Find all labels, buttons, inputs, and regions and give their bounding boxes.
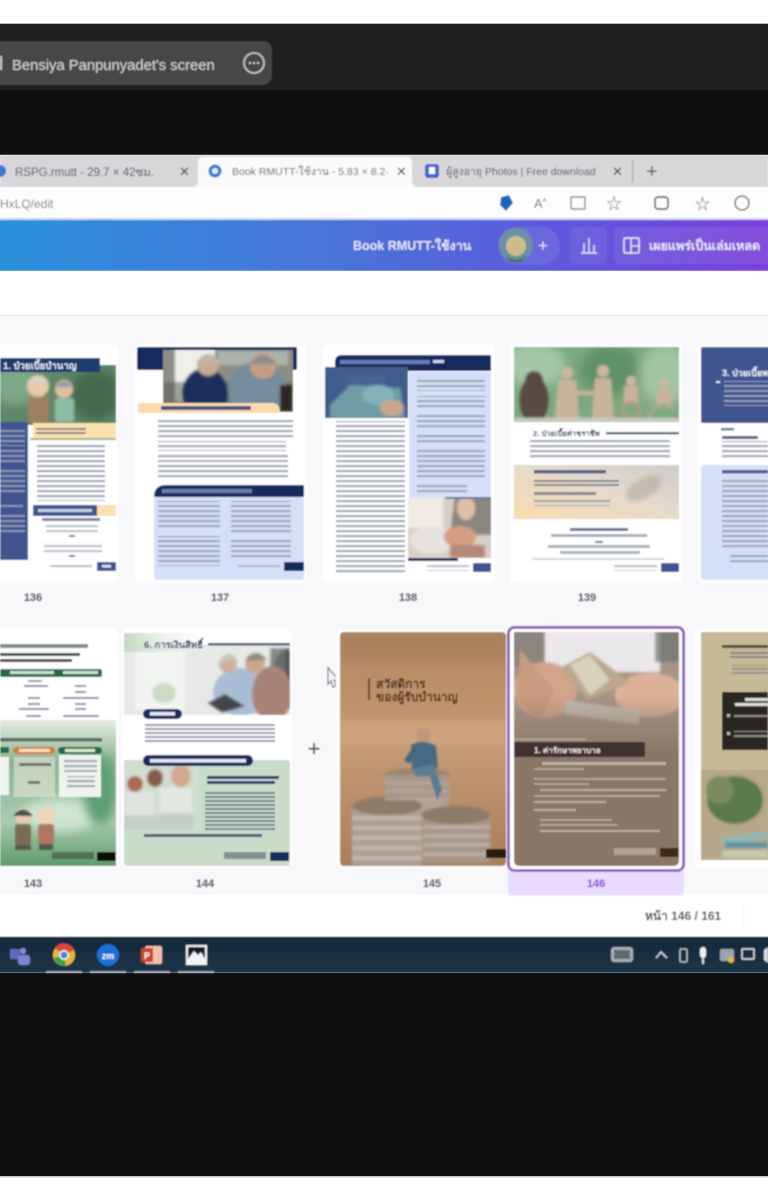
lavender number tab: [508, 860, 684, 895]
text: [207, 776, 279, 779]
page numbers row one: 138: [399, 592, 417, 604]
left text: [336, 421, 405, 575]
address bar: [0, 187, 768, 220]
browser tab strip: ผู้สูงอายุ Photos | Free download: [446, 166, 596, 178]
text: [721, 428, 768, 459]
icon: teams: [10, 948, 30, 965]
photo: group: [124, 760, 198, 829]
blue header: [701, 347, 768, 423]
icon: zoom: [97, 944, 119, 966]
footer tag: [224, 852, 289, 861]
yellow heading bar: [138, 403, 280, 413]
blue side panel: [0, 422, 28, 560]
footer tag: [52, 852, 116, 861]
beige band: [514, 465, 679, 519]
windows taskbar: [0, 937, 768, 973]
screen share name pill: [0, 41, 272, 85]
page numbers row one: 139: [578, 592, 596, 604]
photo: wooden figures: [513, 346, 680, 423]
page numbers row two: 144: [196, 878, 215, 890]
mouse cursor: [328, 668, 339, 687]
page 147 cropped: [700, 632, 768, 861]
system tray: [611, 947, 768, 964]
page numbers row one: 137: [211, 592, 229, 604]
lower brown panel: [514, 738, 679, 866]
page numbers row two: [24, 878, 605, 890]
taskbar active underlines: [46, 971, 214, 973]
address bar: HxLQ/edit: [0, 197, 54, 211]
coin stacks: [352, 768, 490, 866]
green table: [0, 669, 102, 717]
body text: [530, 440, 670, 460]
photo: paperwork: [408, 498, 492, 560]
address bar: ☆: [606, 195, 622, 213]
heading text: [0, 644, 88, 662]
page numbers row one: 136: [24, 592, 42, 604]
icon: photos: [186, 945, 207, 965]
light blue panel: [701, 465, 768, 580]
navy heading: [335, 355, 491, 371]
Canva editor header: +: [538, 236, 548, 255]
page numbers row two: 143: [24, 878, 42, 890]
green heading band: [124, 633, 290, 652]
page 143: [0, 629, 118, 868]
navy strip: [408, 558, 458, 561]
browser tab strip: RSPG.rmutt - 29.7 × 42ซม.: [15, 167, 154, 179]
white toolbar and page grid background: [0, 271, 768, 895]
centred text: [42, 518, 102, 557]
page 144: [120, 629, 300, 868]
page 138: [324, 354, 492, 573]
page numbers row two: 146: [587, 878, 605, 890]
light blue panel: [409, 372, 491, 499]
cover title: [368, 678, 370, 700]
green heading band: 6. การเงินสิทธิ์: [144, 637, 205, 651]
photo: couple at laptop: [124, 644, 291, 716]
page counter footer: หน้า 146 / 161: [645, 909, 722, 923]
panel heading: [0, 738, 102, 742]
body text: [145, 722, 275, 744]
right text: [417, 377, 485, 494]
pillars: [0, 757, 9, 795]
body text: [158, 418, 293, 480]
page 146 selected: [508, 628, 685, 895]
footer tag: [427, 563, 491, 572]
dark heading bar: [514, 742, 645, 757]
screen share name pill: Bensiya Panpunyadet's screen: [12, 58, 215, 74]
thumbnails row one: [0, 343, 768, 583]
green panel: [120, 755, 290, 866]
page 137: [135, 344, 306, 583]
yellow callout: [30, 423, 116, 440]
heading: 2. ป่วยเบี้ยค่าชราชีพ: [533, 427, 600, 438]
seated figure: [404, 728, 442, 800]
body text: [37, 443, 105, 501]
browser tab strip: ✕: [179, 164, 190, 179]
centred text: [532, 528, 664, 560]
number tag: [486, 849, 506, 858]
page 145 cover: ของผู้รับบำนาญ: [376, 690, 458, 705]
page numbers row one: [24, 592, 596, 604]
title bar: 1. ป่วยเบี้ยบำนาญ: [3, 358, 77, 372]
page 145 cover: [336, 629, 506, 868]
browser tab strip: +: [646, 161, 658, 183]
thumbnails row two: [0, 628, 768, 895]
green photo panel: [0, 718, 116, 866]
browser tab strip: ✕: [612, 164, 623, 179]
figurines: [13, 806, 55, 850]
page counter footer: [0, 894, 768, 937]
photo: elderly figures: [0, 364, 117, 426]
icon: zoom: zm: [102, 951, 114, 961]
photo: blue hands: [324, 366, 409, 419]
Canva editor header: Book RMUTT-ใช้งาน: [353, 238, 472, 253]
body text: [534, 762, 666, 832]
icon: powerpoint: P: [144, 951, 150, 961]
page 140 cropped: [697, 344, 768, 583]
photo: plant and books: [700, 770, 768, 860]
Canva editor header: [0, 220, 768, 271]
heading text: [722, 645, 768, 676]
footer tag: [614, 563, 679, 572]
light blue panel: [154, 485, 304, 580]
title bar: [0, 358, 100, 372]
add page plus: +: [308, 736, 320, 761]
page 136: [0, 357, 117, 572]
address bar: ᴬ: [542, 197, 547, 206]
page 139: [513, 346, 680, 573]
pill label: [143, 709, 182, 719]
footer tag: [614, 848, 679, 857]
page numbers row two: 145: [423, 878, 441, 890]
footer tag: [50, 562, 116, 571]
address bar: A: [534, 196, 543, 211]
dark callout box: [722, 692, 768, 750]
Canva editor header: เผยแพร่เป็นเล่มเหลด: [649, 238, 760, 253]
address bar: ☆: [695, 196, 710, 213]
icon: chrome: [53, 943, 75, 966]
browser tab strip: [0, 155, 768, 188]
page 145 cover: สวัสดิการ: [376, 677, 426, 691]
icon: powerpoint: [141, 946, 162, 964]
dark heading bar: 1. ค่ารักษาพยาบาล: [534, 746, 601, 755]
photo: hands counting money: [510, 628, 685, 756]
pill heading: [143, 755, 253, 766]
label bar: [33, 505, 116, 516]
photo: elderly couple: [162, 348, 294, 413]
browser tab strip: ✕: [396, 164, 407, 179]
browser tab strip: Book RMUTT-ใช้งาน - 5.83 × 8.2·: [232, 165, 389, 178]
